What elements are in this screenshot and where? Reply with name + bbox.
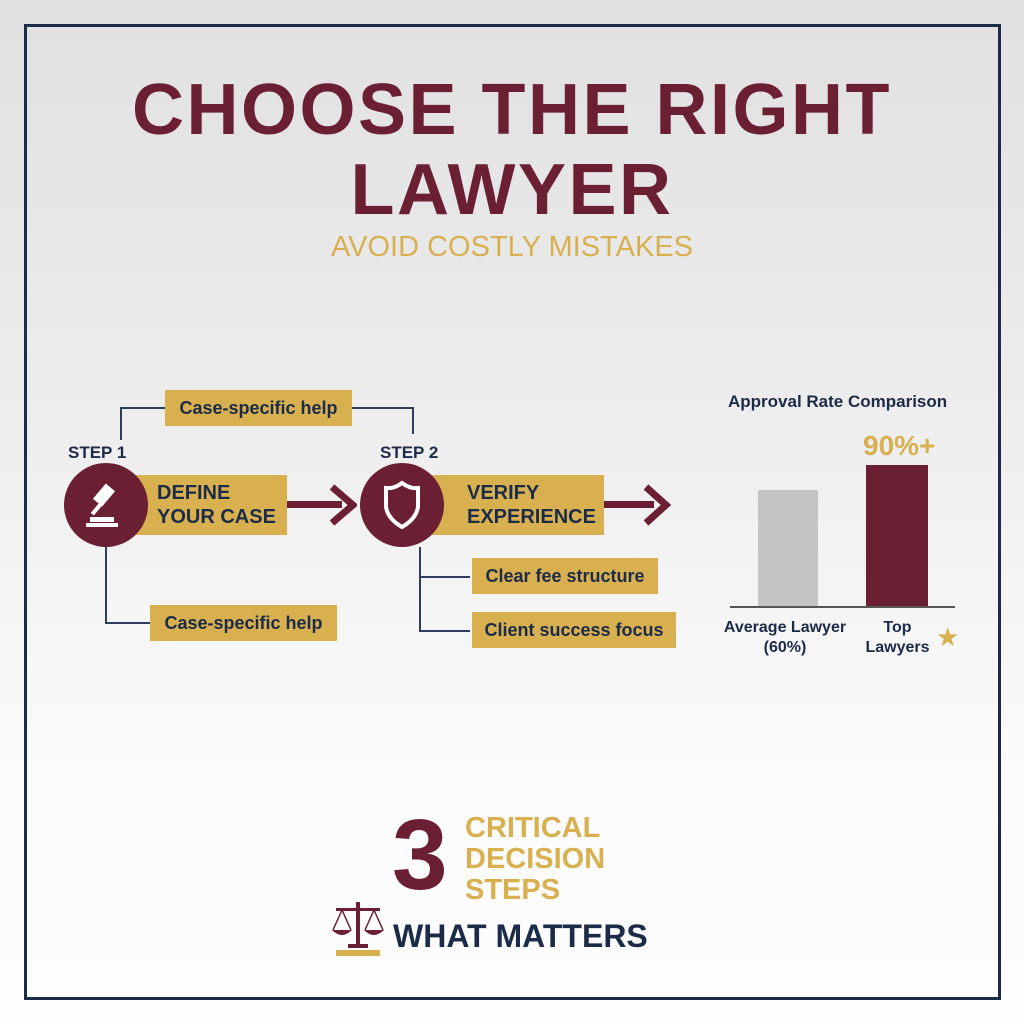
note: client success focus: Client success focus: [484, 620, 664, 640]
bar chart: 90%+: [863, 430, 935, 461]
icon: scales: [332, 902, 384, 956]
bar chart: (60%): [764, 639, 806, 656]
step 2 icon: shield: [360, 463, 444, 547]
step 1 box: DEFINE: [157, 482, 230, 504]
note: client success focus: [472, 612, 676, 648]
title: [132, 70, 892, 230]
summary block: WHAT MATTERS: [393, 918, 648, 954]
note: case-specific help: [150, 605, 337, 641]
step 2 box: VERIFY: [467, 482, 539, 504]
summary block: DECISION: [465, 843, 605, 875]
step 1 box: [130, 475, 287, 535]
title: CHOOSE THE RIGHT: [132, 70, 892, 150]
summary block: [332, 799, 648, 956]
icon: star: ★: [936, 622, 959, 652]
bar chart: [724, 392, 959, 656]
step 1 box: YOUR CASE: [157, 506, 276, 528]
step 1 icon: gavel: [64, 463, 148, 547]
title: LAWYER: [350, 150, 674, 230]
step 2 box: [425, 475, 604, 535]
bar chart: Top: [883, 619, 912, 636]
arrow 2: [604, 484, 672, 526]
bar chart: Lawyers: [865, 639, 930, 656]
step 2 box: EXPERIENCE: [467, 506, 596, 528]
summary block: 3: [392, 799, 448, 911]
summary block: CRITICAL: [465, 812, 600, 844]
subtitle: AVOID COSTLY MISTAKES: [331, 231, 693, 263]
note: clear fee structure: [472, 558, 658, 594]
step 1 label: STEP 1: [68, 443, 126, 462]
summary block: STEPS: [465, 874, 560, 906]
note: case-specific help: Case-specific help: [164, 613, 323, 633]
step 2 label: STEP 2: [380, 443, 438, 462]
top note: case-specific help: Case-specific help: [179, 398, 338, 418]
arrow 1: [287, 484, 357, 526]
flow diagram: [64, 390, 676, 648]
note: clear fee structure: Clear fee structure: [485, 566, 645, 586]
bar chart: Approval Rate Comparison: [728, 392, 947, 411]
top note: case-specific help: [165, 390, 352, 426]
bar chart: Average Lawyer: [724, 619, 846, 636]
